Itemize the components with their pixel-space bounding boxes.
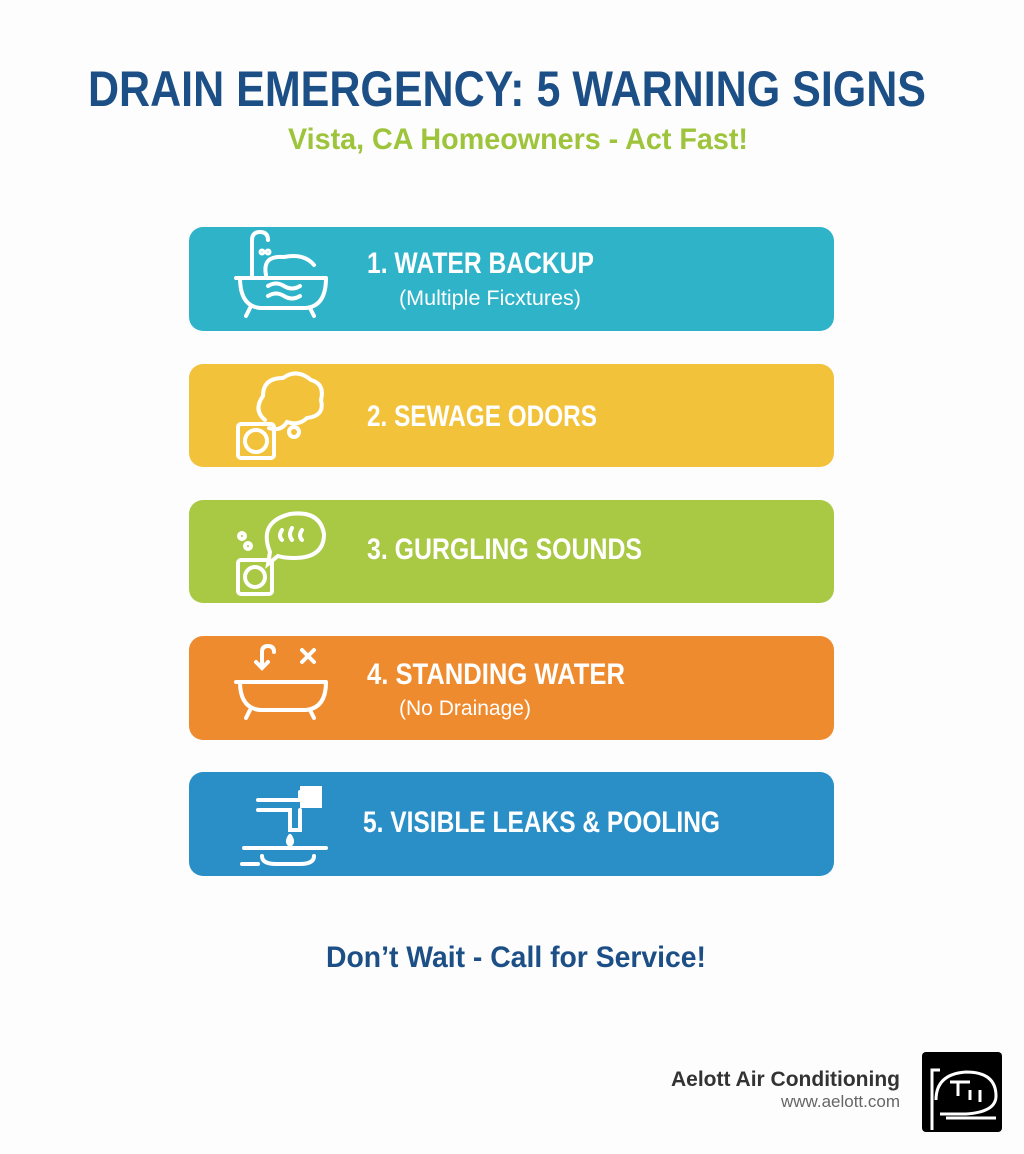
panel: standing water: (No Drainage) bbox=[399, 697, 531, 720]
text: item 2: 2. SEWAGE ODORS bbox=[367, 400, 597, 433]
icon: bathtub overflowing bbox=[236, 232, 326, 316]
text: item 3: 3. GURGLING SOUNDS bbox=[367, 533, 642, 566]
icon: bathtub with X bbox=[236, 646, 326, 718]
panel: gurgling sounds bbox=[189, 500, 834, 603]
icon: odor cloud and drain bbox=[238, 373, 322, 458]
call to action: Don’t Wait - Call for Service! bbox=[326, 941, 706, 974]
subtitle: Vista, CA Homeowners - Act Fast! bbox=[288, 123, 748, 156]
text: item 5: 5. VISIBLE LEAKS & POOLING bbox=[363, 806, 720, 839]
brand text: Aelott Air Conditioning bbox=[671, 1068, 900, 1091]
icon: leaking pipe bbox=[242, 788, 326, 864]
panel: sewage odors bbox=[189, 364, 834, 467]
panel: water backup bbox=[189, 227, 834, 331]
panel: standing water bbox=[189, 636, 834, 740]
panel: water backup: (Multiple Ficxtures) bbox=[399, 287, 581, 310]
text: item 1: 1. WATER BACKUP bbox=[367, 247, 594, 280]
logo bbox=[922, 1052, 1002, 1132]
brand text bbox=[671, 1068, 900, 1111]
panel: visible leaks bbox=[189, 772, 834, 876]
brand text: www.aelott.com bbox=[780, 1092, 900, 1111]
icon: speech bubble and drain bbox=[238, 513, 324, 594]
text: item 4: 4. STANDING WATER bbox=[367, 658, 625, 691]
